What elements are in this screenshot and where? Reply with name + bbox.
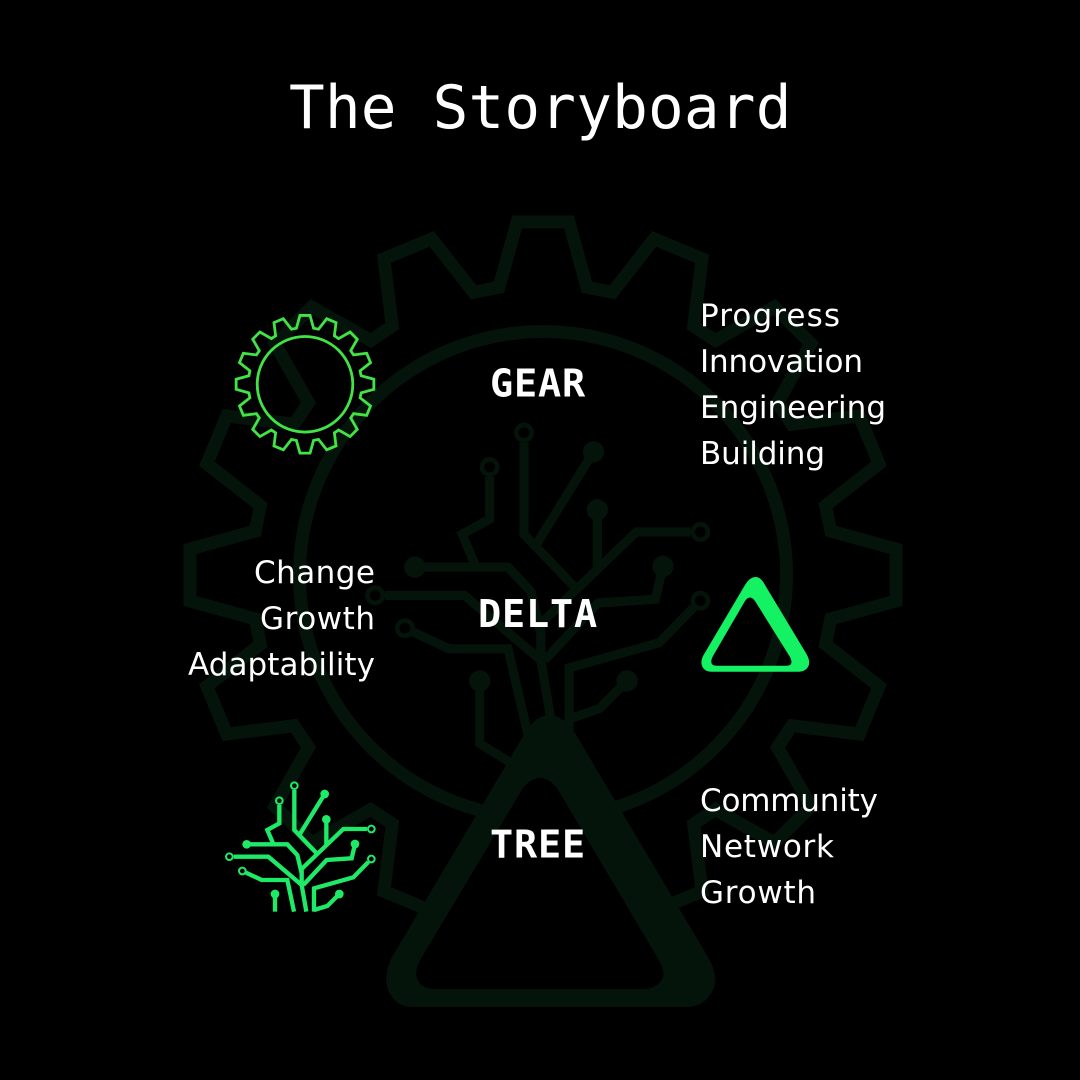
text block: gear keywords: Progress <box>700 298 840 334</box>
heading: DELTA: DELTA <box>478 592 598 637</box>
background watermark: large circuit tree <box>367 425 708 765</box>
text block: gear keywords: Engineering <box>700 390 886 426</box>
text block: gear keywords: Innovation <box>700 344 863 380</box>
background watermark: large delta triangle <box>386 715 715 1007</box>
text block: tree keywords: Community <box>700 783 878 819</box>
text block: delta keywords: Change <box>254 555 375 591</box>
text block: delta keywords: Growth <box>260 601 375 637</box>
text block: gear keywords <box>700 298 886 472</box>
row: gear <box>236 298 886 472</box>
title: The Storyboard <box>289 73 792 142</box>
icon: gear <box>236 315 374 453</box>
text block: gear keywords: Building <box>700 436 825 472</box>
text block: tree keywords: Growth <box>700 875 816 911</box>
row: tree <box>226 782 878 912</box>
icon: delta triangle <box>701 577 809 672</box>
text block: tree keywords: Network <box>700 829 834 865</box>
heading: TREE: TREE <box>490 822 586 868</box>
text block: delta keywords <box>188 555 375 683</box>
background watermark: large gear <box>190 222 896 928</box>
text block: delta keywords: Adaptability <box>188 647 375 683</box>
icon: circuit tree <box>226 782 375 912</box>
heading: GEAR: GEAR <box>490 362 586 407</box>
row: delta <box>188 555 809 683</box>
text block: tree keywords <box>700 783 878 911</box>
